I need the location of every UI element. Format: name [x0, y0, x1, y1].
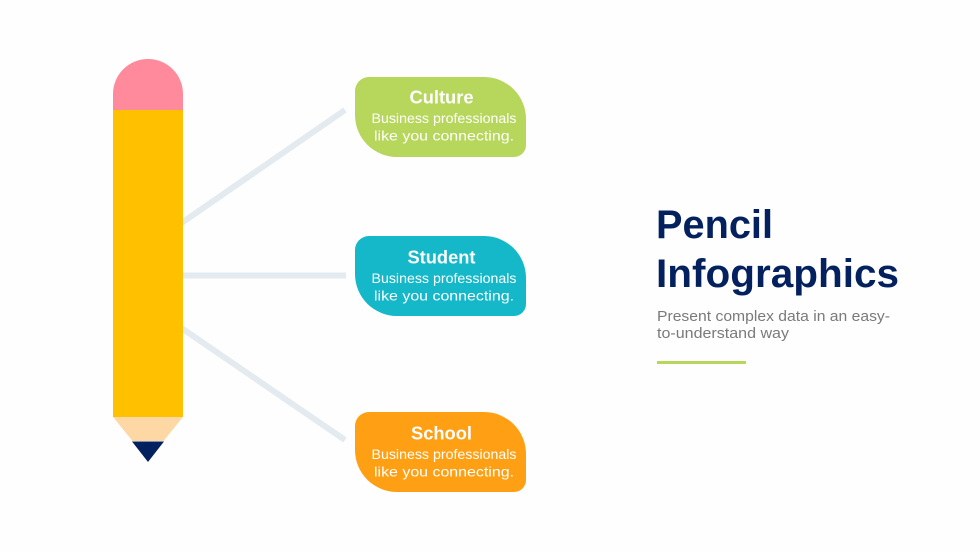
Student description: Business professionals	[372, 270, 516, 286]
connector: pencil to Culture	[180, 110, 345, 224]
Culture description: Business professionals	[372, 110, 516, 126]
pencil lead tip	[132, 442, 164, 462]
pencil body	[113, 110, 183, 417]
subtitle text: to-understand way	[657, 325, 790, 342]
Culture card shape	[355, 77, 526, 157]
School card shape	[355, 412, 526, 492]
subtitle text: Present complex data in an easy-	[657, 308, 890, 325]
School description: like you connecting.	[374, 464, 514, 480]
icon: pencil	[113, 59, 183, 462]
Culture heading: Culture	[410, 88, 474, 108]
Student heading: Student	[408, 248, 476, 268]
connector: pencil to School	[180, 327, 345, 440]
panel: School	[355, 412, 526, 492]
connector: pencil to Student	[180, 272, 346, 278]
pencil eraser	[113, 59, 183, 110]
Culture description: like you connecting.	[374, 128, 514, 144]
School heading: School	[411, 424, 472, 444]
title: Pencil	[656, 203, 773, 247]
panel: Student	[355, 236, 526, 316]
pencil wood cone	[113, 417, 183, 441]
accent underline	[657, 361, 746, 364]
School description: Business professionals	[372, 446, 516, 462]
Student description: like you connecting.	[374, 288, 514, 304]
title: Infographics	[656, 252, 899, 296]
Student card shape	[355, 236, 526, 316]
panel: Culture	[355, 77, 526, 157]
